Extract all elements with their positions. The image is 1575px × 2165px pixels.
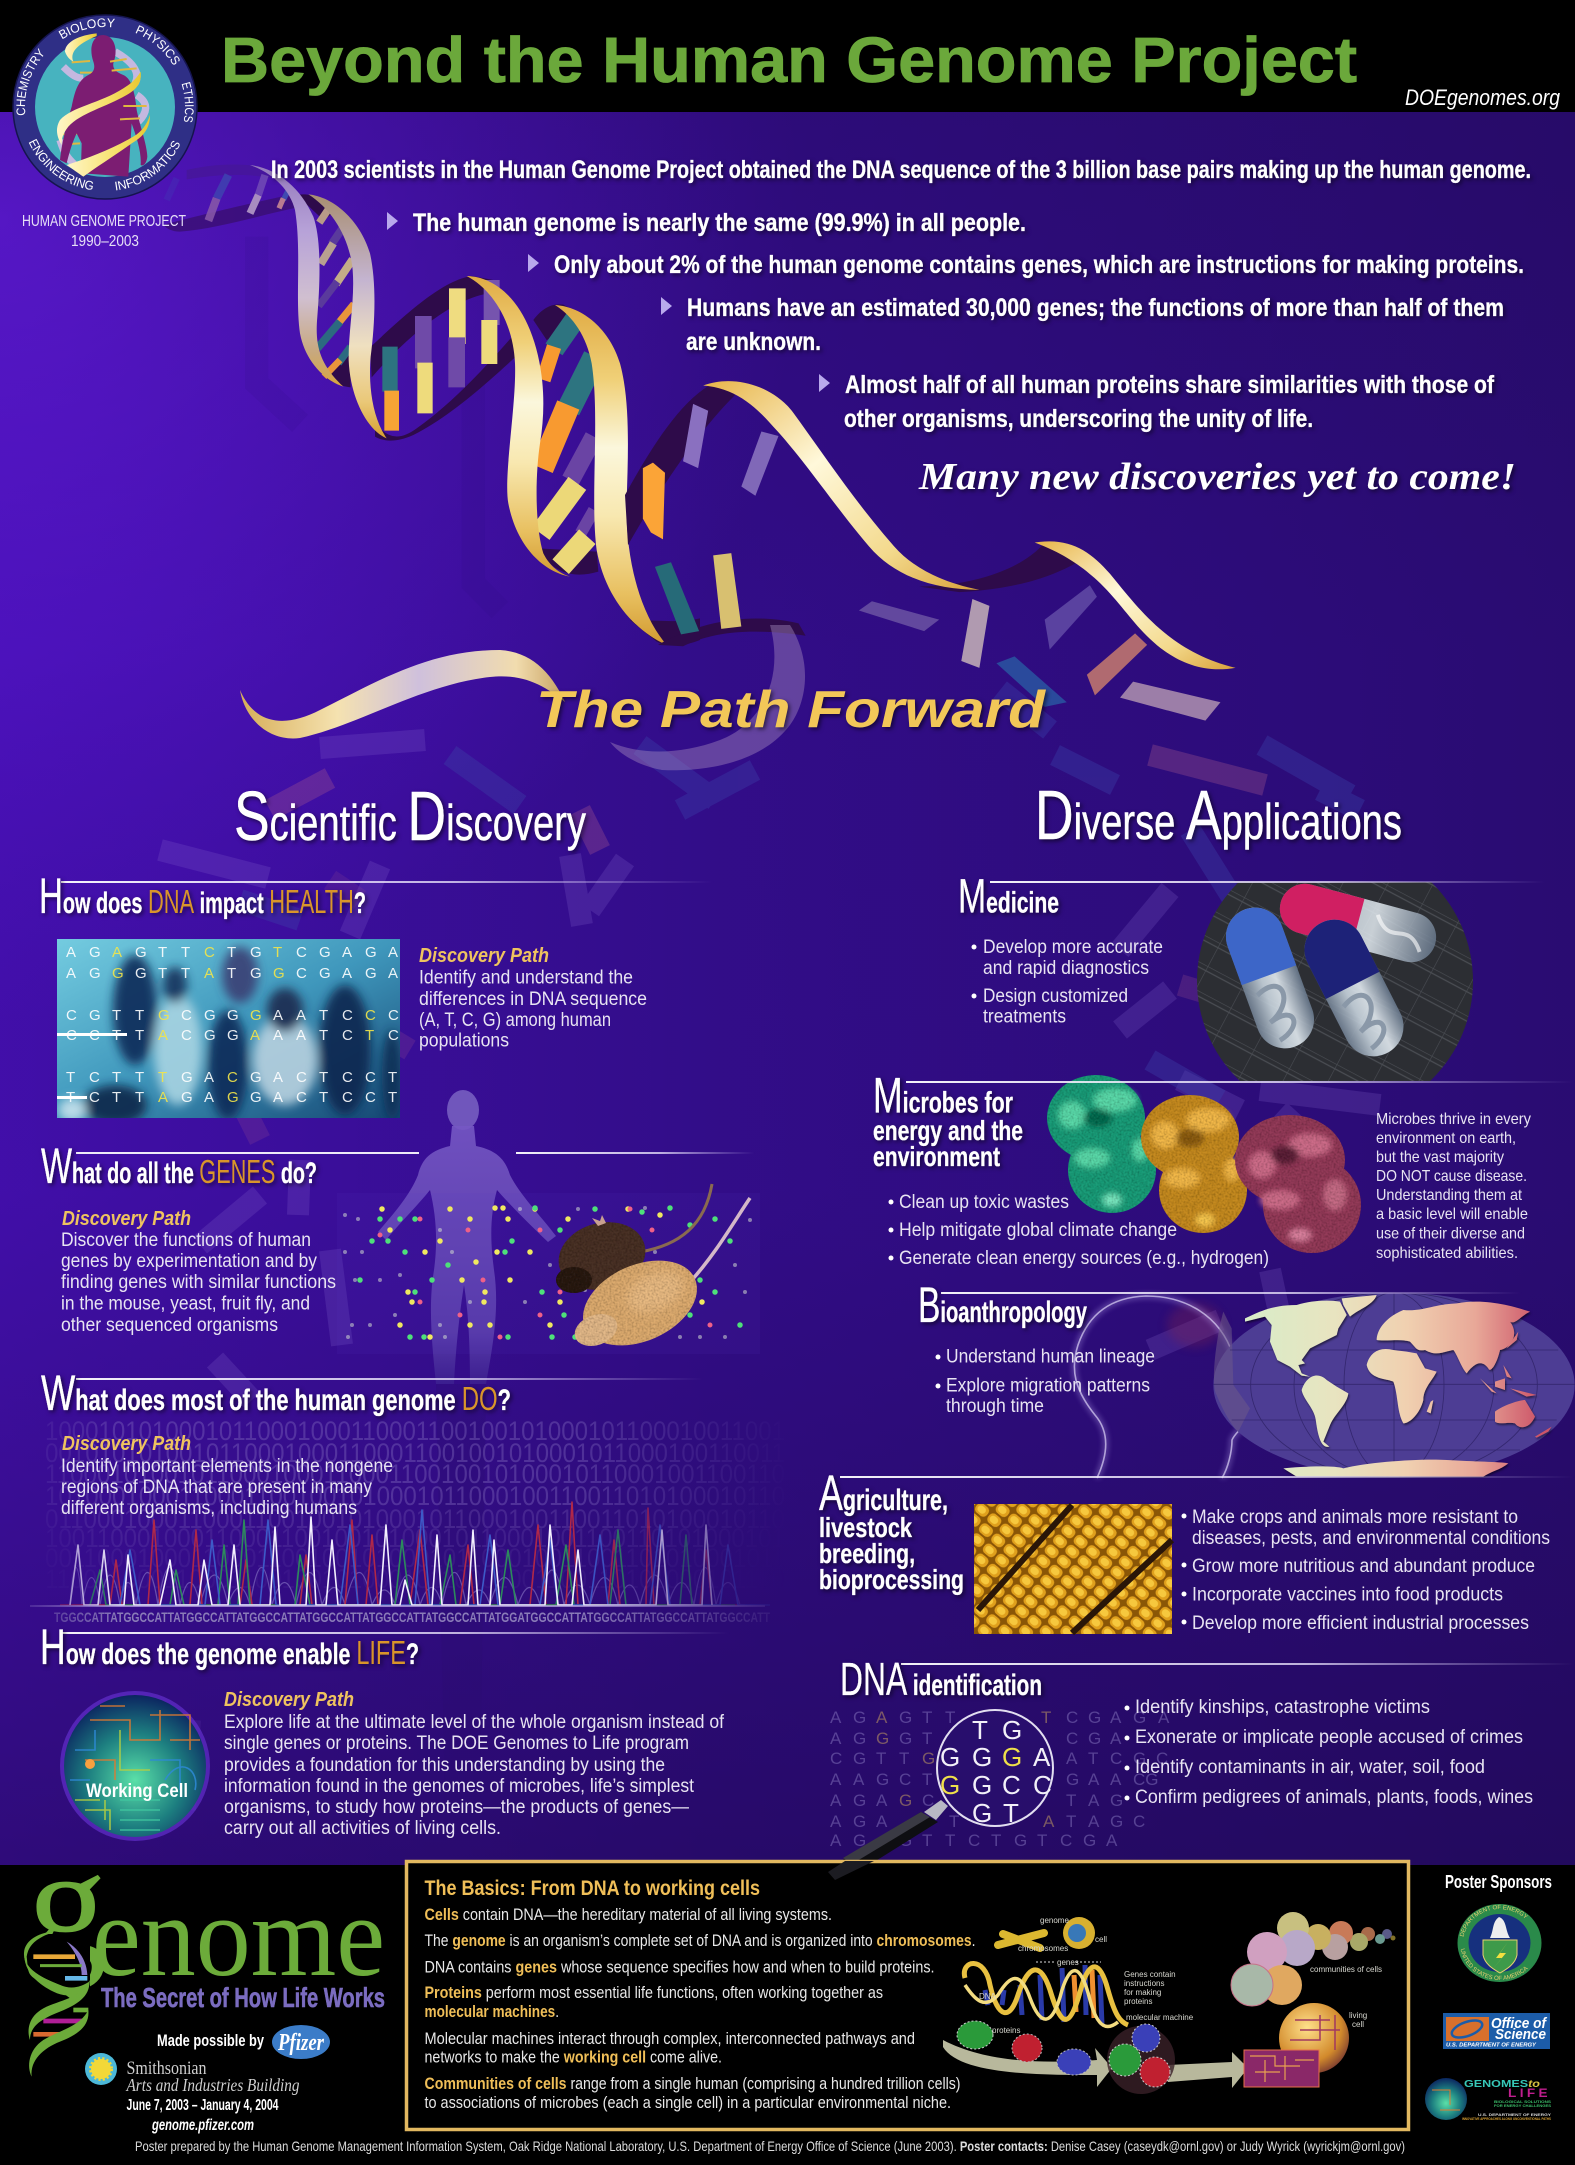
bullets: Identify contaminants in air, water, soil, food	[1135, 1757, 1485, 1778]
diagram labels: DNA	[979, 1992, 997, 2001]
discovery path text: carry out all activities of living cells.	[224, 1818, 501, 1839]
bullet: 30,000 genes	[661, 294, 1504, 356]
logo caption: 1990–2003	[71, 233, 139, 250]
logo ring text: CHEMISTRY	[16, 48, 44, 116]
working cell circle: Working Cell	[86, 1781, 188, 1802]
bullet: 30,000 genes: are unknown.	[686, 328, 821, 356]
living cell	[1244, 2003, 1349, 2087]
heading: The Path Forward: The Path Forward	[536, 681, 1046, 739]
heading: DNA identification	[840, 1653, 1042, 1705]
faded DNA letter grid: AGAT A TAGC	[830, 1812, 1145, 1831]
bullets: diseases, pests, and environmental conditions	[1192, 1528, 1550, 1549]
basics text block: DNA contains genes whose sequence specifies how and when to build proteins.	[424, 1959, 934, 1977]
bullets: treatments	[983, 1006, 1066, 1028]
tagline: Many new discoveries yet to come!	[918, 456, 1516, 498]
heading: What do all the GENES do?	[41, 1138, 317, 1194]
diagram labels: proteins	[1124, 1997, 1152, 2006]
discovery path text: Explore life at the ultimate level of the whole organism instead of	[224, 1712, 725, 1733]
logo: g with DNA strand	[10, 1814, 107, 2077]
side note: but the vast majority	[1376, 1149, 1504, 1166]
discovery path text: other sequenced organisms	[61, 1315, 278, 1336]
bullets: Incorporate vaccines into food products	[1192, 1585, 1503, 1606]
heading: Agriculture,	[819, 1465, 948, 1521]
discovery path text: information found in the genomes of microbes, life’s simplest	[224, 1776, 695, 1797]
binary code backdrop: 11000101001011000100011000110010010100010110001001100110	[45, 1459, 785, 1489]
Smithsonian logo and venue: June 7, 2003 – January 4, 2004	[126, 2097, 279, 2114]
heading: Bioanthropology	[918, 1277, 1087, 1333]
section: medicine	[958, 871, 1546, 1081]
diagram labels: communities of cells	[1310, 1965, 1382, 1974]
basics text block: Cells contain DNA—the hereditary material of all living systems.	[424, 1906, 832, 1924]
logo: Department of Energy seal	[1458, 1904, 1542, 1982]
faded DNA letter grid: CGTT G ATCGC	[830, 1749, 1168, 1768]
section: agriculture: livestock	[819, 1512, 912, 1543]
bottom black band	[0, 1865, 1575, 2165]
discovery path text: Discover the functions of human	[61, 1230, 311, 1251]
logo: Genomes to Life: GENOMES to	[1464, 2079, 1540, 2090]
Smithsonian logo and venue: genome.pfizer.com	[151, 2117, 254, 2134]
basics text block	[424, 1877, 976, 2112]
heading: How does the genome enable LIFE?	[40, 1619, 419, 1675]
faded DNA letter grid: AG A GTT T CGAGA	[830, 1708, 1170, 1727]
genome exhibit logo	[10, 1814, 385, 2134]
Smithsonian logo and venue	[85, 2053, 300, 2134]
big process arrows	[943, 2040, 1248, 2088]
DNA letters over photo: AG G GTT A TG G CGAGA	[66, 965, 398, 982]
bullets	[1182, 1507, 1550, 1634]
magnifying glass: GG G A	[940, 1742, 1051, 1772]
logo figure and helix	[57, 33, 150, 177]
logo: Genomes to Life: INNOVATIVE APPROACHES ALONG UNCONVENTIONAL PATHS	[1462, 2117, 1552, 2121]
binary code backdrop: 10001010100010110001000110001100100101000101100010011001	[45, 1416, 785, 1446]
binary code backdrop: 01100010001100011001001010001011000100110011010100010110	[45, 1504, 785, 1534]
bullets: Make crops and animals more resistant to	[1192, 1507, 1518, 1528]
logo: Genomes to Life	[1425, 2078, 1552, 2121]
section: how the genome enables life	[40, 1619, 730, 1841]
DNA letters over photo: CGTT G CGG G AATC C C	[66, 1007, 399, 1024]
section: bioanthropology	[918, 1277, 1575, 1478]
discovery path text: differences in DNA sequence	[419, 989, 647, 1010]
discovery path text: finding genes with similar functions	[61, 1272, 336, 1293]
helix rising back strand	[625, 382, 735, 545]
photo: crowd with DNA letters	[57, 939, 402, 1125]
chromosomes and cell	[998, 1917, 1095, 1949]
heading: What does most of the human genome DO?	[41, 1365, 511, 1421]
DNA letters over photo: TCTT A GA G GACTCCT	[66, 1089, 397, 1106]
top black header band	[0, 0, 1575, 112]
section: DNA identification	[828, 1653, 1575, 1880]
diagram labels	[979, 1916, 1382, 2035]
bullets: Develop more accurate	[983, 937, 1163, 958]
logo: Genomes to Life: LIFE	[1508, 2086, 1551, 2100]
bullet: nearly the same: The human genome is nearly the same (99.9%) in all people.	[413, 209, 1026, 237]
discovery path text	[224, 1689, 725, 1839]
section: agriculture: breeding,	[819, 1538, 915, 1569]
proteins	[957, 2021, 1175, 2094]
logo caption: HUMAN GENOME PROJECT	[22, 213, 186, 230]
magnifying glass	[828, 1710, 1053, 1880]
discovery path text: different organisms, including humans	[61, 1498, 357, 1519]
ribbon strands	[250, 165, 667, 645]
bullets: and rapid diagnostics	[983, 958, 1149, 979]
title: Beyond the Human Genome Project	[221, 24, 1357, 96]
microbe images	[1047, 1075, 1361, 1253]
basics text block: Communities of cells range from a single human (comprising a hundred trillion cells)	[424, 2075, 960, 2093]
logo ring text: ETHICS	[182, 82, 194, 122]
bullets	[1124, 1697, 1533, 1808]
column heading: Diverse Applications: Diverse Applications	[1035, 776, 1402, 854]
diagram labels: chromosomes	[1018, 1944, 1068, 1953]
bullets: Generate clean energy sources (e.g., hydrogen)	[899, 1248, 1269, 1269]
diagram labels: cell	[1352, 2020, 1364, 2029]
logo: g with DNA strand: g	[27, 1814, 107, 1992]
gold basics box	[406, 1862, 1408, 2130]
bullets: Identify kinships, catastrophe victims	[1135, 1697, 1430, 1718]
section: DNA and health	[39, 868, 714, 1125]
bullets: Grow more nutritious and abundant produce	[1192, 1556, 1535, 1577]
logo: Office of Science: Science	[1495, 2026, 1546, 2043]
section: what most of the genome does	[30, 1365, 785, 1625]
head profile outline	[1074, 1296, 1247, 1478]
microarray gene chip	[337, 1193, 760, 1354]
section: agriculture	[819, 1465, 1575, 1634]
logo: Genomes to Life: BIOLOGICAL SOLUTIONS	[1494, 2099, 1551, 2104]
side note	[1376, 1111, 1531, 1262]
logo ring text: ENGINEERING	[28, 138, 94, 190]
binary code backdrop: 10100010001100011001001010001011000100110011010100010110	[45, 1481, 785, 1511]
diagram labels: instructions	[1124, 1979, 1164, 1988]
basics text block: to associations of microbes (each a single cell) in a particular environmental niche.	[424, 2094, 951, 2112]
heading: Medicine	[958, 871, 1059, 924]
logo: Office of Science	[1443, 2013, 1550, 2049]
logo word: enome: enome	[92, 1873, 385, 2001]
magnifying glass: G GCC	[940, 1770, 1052, 1800]
DNA letters over photo: AG A GTT C TG T CGAGA	[66, 944, 398, 961]
bullets: Confirm pedigrees of animals, plants, foods, wines	[1135, 1787, 1533, 1808]
discovery path text: Discovery Path	[224, 1689, 354, 1711]
discovery path text: in the mouse, yeast, fruit fly, and	[61, 1294, 310, 1314]
binary code backdrop: 10011000100011000110010010100010110001001100110101000101	[45, 1523, 785, 1553]
helix upper part: first two turns	[163, 165, 700, 645]
diagram labels: molecular machine	[1126, 2013, 1194, 2022]
human silhouette	[378, 1090, 556, 1800]
mice	[551, 1184, 750, 1362]
section: microbes: energy and the	[873, 1115, 1023, 1146]
logo ring text	[16, 18, 194, 190]
logo: Genomes to Life: FOR ENERGY CHALLENGES	[1494, 2103, 1551, 2108]
magnifying glass: GT	[972, 1798, 1019, 1828]
discovery path text: Discovery Path	[62, 1208, 191, 1230]
diagram: DNA to working cells	[943, 1912, 1396, 2094]
logo: Department of Energy seal: UNITED STATES OF AMERICA	[1460, 1948, 1528, 1980]
basics text block: The genome is an organism’s complete set of DNA and is organized into chromosomes.	[424, 1932, 976, 1950]
binary code backdrop: 11000100011000110010010100010110001001100110101000101100	[45, 1564, 785, 1594]
faded DNA letter grid	[830, 1708, 1170, 1850]
discovery path text: organisms, to study how proteins—the products of genes—	[224, 1797, 689, 1818]
Smithsonian logo and venue: Smithsonian	[126, 2058, 207, 2079]
corn photo	[974, 1504, 1172, 1634]
bullets: Exonerate or implicate people accused of crimes	[1135, 1727, 1523, 1748]
side note: DO NOT cause disease.	[1376, 1168, 1527, 1185]
discovery path text: populations	[419, 1030, 509, 1052]
DNA letters over photo: TCTT T GA C GACTCCT	[66, 1069, 397, 1086]
world map	[1213, 1292, 1575, 1478]
side note: Microbes thrive in every	[1376, 1111, 1531, 1128]
diagram labels: genes	[1057, 1958, 1079, 1967]
logo ring text: INFORMATICS	[115, 140, 180, 190]
bullets: Clean up toxic wastes	[899, 1192, 1069, 1213]
magnifying glass: TG	[972, 1715, 1022, 1745]
logo: Genomes to Life: U.S. DEPARTMENT OF ENERGY	[1478, 2112, 1551, 2117]
logo caption	[22, 213, 186, 250]
lower ribbon	[240, 650, 565, 738]
heading: Microbes for	[873, 1068, 1013, 1124]
discovery path text: Identify important elements in the nongene	[61, 1456, 393, 1477]
side note: sophisticated abilities.	[1376, 1245, 1518, 1262]
DNA molecule	[964, 1963, 1128, 2027]
basics text block: Proteins perform most essential life functions, often working together as	[424, 1984, 883, 2002]
lower ribbon tail	[610, 625, 805, 770]
sponsor line and Pfizer logo	[157, 2025, 330, 2059]
faded DNA letter grid: AAGCTGAACG	[830, 1770, 1158, 1789]
bullets	[936, 1347, 1155, 1417]
binary code backdrop	[46, 1421, 748, 1588]
side note: Understanding them at	[1376, 1187, 1523, 1204]
discovery path text: genes by experimentation and by	[61, 1251, 317, 1272]
section: microbes	[873, 1068, 1575, 1269]
right ribbon strands	[703, 381, 1236, 669]
diagram labels: proteins	[992, 2026, 1020, 2035]
discovery path text: Identify and understand the	[419, 968, 633, 988]
diagram labels: for making	[1124, 1988, 1161, 1997]
bullets: Explore migration patterns	[946, 1376, 1150, 1397]
basics text block: Molecular machines interact through complex, interconnected pathways and	[424, 2030, 915, 2048]
sequencer trace chart	[30, 1502, 770, 1606]
diagram labels: Genes contain	[1124, 1970, 1176, 1979]
faded DNA letter grid: AGGTTCTGTCGA	[830, 1831, 1118, 1850]
discovery path text: regions of DNA that are present in many	[61, 1477, 372, 1498]
discovery path text: single genes or proteins. The DOE Genomes to Life program	[224, 1733, 689, 1754]
sponsor line and Pfizer logo: Made possible by	[157, 2031, 264, 2050]
section: agriculture: bioprocessing	[819, 1564, 964, 1595]
logo ring text: BIOLOGY	[58, 18, 115, 39]
diagram labels: cell	[1095, 1935, 1107, 1944]
Smithsonian logo and venue: Arts and Industries Building	[126, 2075, 300, 2095]
discovery path text	[61, 1208, 336, 1336]
discovery path text	[419, 945, 647, 1052]
bullets: through time	[946, 1396, 1044, 1417]
side note: a basic level will enable	[1376, 1206, 1528, 1223]
base pair bars	[167, 175, 595, 567]
bullet: shared proteins: other organisms, underscoring the unity of life.	[844, 405, 1313, 433]
discovery path text: provides a foundation for this understanding by using the	[224, 1755, 665, 1776]
logo ring text: PHYSICS	[136, 25, 180, 65]
DNA double helix ribbon	[163, 165, 1236, 770]
sponsor line and Pfizer logo: Pfizer	[277, 2030, 325, 2056]
diagram labels: genome	[1040, 1916, 1069, 1925]
bullets: Help mitigate global climate change	[899, 1220, 1177, 1241]
bullets	[888, 1192, 1269, 1269]
discovery path text: (A, T, C, G) among human	[419, 1010, 611, 1031]
section: microbes: environment	[873, 1141, 1000, 1172]
communities of cells spheres	[1231, 1912, 1396, 2006]
side note: environment on earth,	[1376, 1130, 1516, 1147]
column heading: Scientific Discovery: Scientific Discovery	[234, 777, 586, 855]
section: what genes do	[41, 1138, 760, 1362]
logo: Office of Science: U.S. DEPARTMENT OF ENERGY	[1446, 2042, 1537, 2048]
tagline: The Secret of How Life Works	[101, 1982, 385, 2013]
basics text block: The Basics: From DNA to working cells	[424, 1877, 760, 1900]
basics text block: networks to make the working cell come alive.	[424, 2049, 722, 2067]
bullet: shared proteins	[819, 371, 1495, 433]
DNA letters over photo	[66, 944, 399, 1106]
sequence letters: TGGCCATTATGGCCATTATGGCCATTATGGCCATTATGGCCATTATGGCCATTATGGCCATTATGGATGGCCATTATGGCCATTATGGCCATTATGGCCATT	[54, 1609, 770, 1625]
discovery path text: Discovery Path	[62, 1433, 191, 1455]
poster sponsors	[1425, 1872, 1552, 2121]
basics text block: molecular machines.	[424, 2003, 559, 2021]
logo: Human Genome Project seal	[12, 14, 198, 200]
faint scattered DNA base bars	[160, 690, 1380, 1810]
heading: How does DNA impact HEALTH?	[39, 868, 366, 924]
scattered bars near helix	[643, 404, 1220, 721]
diagram labels: living	[1349, 2011, 1367, 2020]
discovery path text	[61, 1433, 393, 1519]
pill capsules image	[1197, 878, 1474, 1081]
footer credits: Poster prepared by the Human Genome Management Information System, Oak Ridge National Laboratory, U.S. Department of Energy Office of Science (June 2003). Poster contacts: Denise Casey (caseydk@ornl.gov) or Judy Wyrick (wyrickjm@ornl.gov)	[135, 2138, 1405, 2154]
logo: Department of Energy seal: DEPARTMENT OF ENERGY	[1460, 1904, 1528, 1936]
logo: Office of Science: Office of	[1491, 2015, 1548, 2032]
binary code backdrop: 00101010100101100010001100011001001010001011000100110011	[45, 1438, 785, 1468]
binary code backdrop: 00110001000110001100100101000101100010011001101010001011	[45, 1543, 785, 1573]
faded DNA letter grid: AG G GTCGA	[830, 1729, 1122, 1748]
discovery path text: Discovery Path	[419, 945, 549, 967]
helix lower part: right turns	[643, 381, 1236, 721]
bullets: Develop more efficient industrial processes	[1192, 1613, 1529, 1634]
side note: use of their diverse and	[1376, 1226, 1525, 1242]
magnifier handle over box	[828, 1861, 874, 1880]
bullets: Design customized	[983, 986, 1128, 1007]
bullets	[972, 937, 1163, 1028]
faded DNA letter grid: AGA G CTAG	[830, 1791, 1123, 1810]
DNA letters over photo: CCTT A CGG A AATC T C	[66, 1027, 399, 1044]
working cell circle	[60, 1691, 210, 1841]
bullets: Understand human lineage	[946, 1347, 1155, 1368]
